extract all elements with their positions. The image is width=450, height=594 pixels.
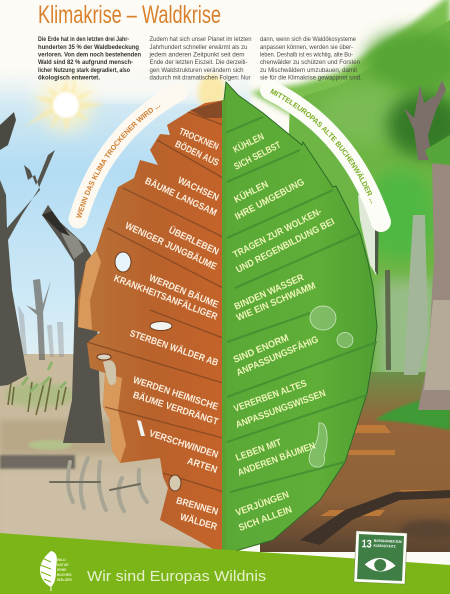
leaf labels: forest abilities: TRAGEN ZUR WOLKEN- [231,206,324,261]
leaf labels: forest abilities: ANPASSUNGSFÄHIG [235,334,320,379]
leaf labels: climate effects: BRENNEN [175,495,219,518]
intro text: column 2: dadurch mit dramatischen Folgen: Nur [150,74,251,82]
intro text: column 2: Zudem hat sich unser Planet im letzten [150,36,252,43]
illustration: dry ground [0,354,240,549]
illustration: forest floor [260,372,450,552]
logo wordmark: WILD [57,558,66,562]
midrib [222,100,226,550]
illustration: large dead tree left [0,112,55,386]
leaf labels: forest abilities [231,131,337,534]
illustration: green forest background [250,0,450,400]
intro text: column 3: dann, wenn sich die Waldökosysteme [260,36,356,43]
leaf labels: climate effects: ARTEN [186,456,219,476]
leaf labels: forest abilities: ANDEREN BÄUMEN [236,440,317,479]
footer slogan: Wir sind Europas Wildnis [87,568,266,585]
leaf labels: forest abilities: WIE EIN SCHWAMM [235,280,317,324]
leaf labels: climate effects: VERSCHWINDEN [148,428,220,461]
banner: left climate [68,92,188,228]
illustration: glow at the burning leaf tip [198,74,226,110]
illustration: broken dead tree [42,205,105,443]
leaf labels: climate effects: BÄUME LANGSAM [143,176,218,219]
logo wordmark [57,558,72,582]
leaf labels: climate effects: ÜBERLEBEN [167,225,220,258]
intro text: column 2: jedem anderen Zeitpunkt seit dem [149,52,245,58]
intro text: column 3 [260,36,362,82]
leaf labels: forest abilities: SIND ENORM [232,333,290,366]
leaf labels: climate effects [112,126,221,533]
intro text: column 2: Jahrhundert schneller erwärmt als zu [150,44,248,51]
badge: SDG 13 climate action: 13 [361,538,372,551]
intro text: column 1: verloren. Von dem noch bestehenden [38,52,141,58]
icon: beech leaf [40,551,57,591]
logo wordmark: WÄLDER [57,578,72,582]
illustration: big beech tree right [404,80,450,410]
intro text: column 1: licher Nutzung stark degradiert, also [38,67,130,74]
intro text: column 2: gen Waldstrukturen verändern sich [150,67,244,74]
logo wordmark: ERBE [57,568,67,572]
intro text: column 2: Ende der letzten Eiszeit. Die derzeiti- [150,59,248,66]
intro text: column 1: ökologisch entwertet. [38,74,100,82]
intro text: column 3: zu Mischwäldern umzubauen, damit [260,67,357,74]
banner: right beech forests: MITTELEUROPAS ALTE BUCHENWÄLDER ... [270,88,372,204]
leaf labels: forest abilities: BINDEN WASSER [233,272,306,313]
leaf labels: forest abilities: UND REGENBILDUNG BEI [234,216,337,276]
leaf labels: climate effects: WÄLDER [179,512,218,533]
illustration: dead rib-like roots [50,458,147,511]
intro text: column 1: Die Erde hat in den letzten drei Jahr- [38,36,129,43]
leaf labels: forest abilities: IHRE UMGEBUNG [233,177,306,223]
leaf labels: forest abilities: VERERBEN ALTES [232,378,309,415]
icon: eye with globe [364,557,396,572]
footer logo [40,551,72,591]
badge: SDG 13 climate action: MASSNAHMEN ZUM [374,539,402,544]
illustration: sun [22,72,105,133]
intro text: column 3: leben. Deshalb ist es wichtig, alte Bu- [260,52,353,58]
intro text: column 1: hunderten 35 % der Waldbedeckung [38,44,139,51]
leaf labels: forest abilities: KÜHLEN [231,131,266,156]
leaf labels: forest abilities: VERJÜNGEN [234,489,291,519]
leaf labels: climate effects: BÖDEN AUS [173,139,221,169]
leaf labels: climate effects: KRANKHEITSANFÄLLIGER [112,273,219,323]
leaf labels: forest abilities: LEBEN MIT [234,437,283,464]
banner: right beech forests [260,82,391,232]
illustration: distant dead trees [18,279,64,360]
badge: SDG 13 climate action: KLIMASCHUTZ [373,544,396,549]
badge: SDG 13 climate action [354,531,407,584]
intro text: column 2 [149,36,252,82]
title: Klimakrise – Waldkrise [38,1,221,29]
leaf labels: forest abilities: SICH ALLEIN [237,504,294,534]
logo wordmark: BUCHEN [57,573,72,577]
intro text: column 3: anpassen können, werden sie über- [260,44,353,51]
leaf labels: climate effects: WENIGER JUNGBÄUME [123,220,219,273]
leaf labels: climate effects: STERBEN WÄLDER AB [128,328,220,369]
leaf labels: forest abilities: ANPASSUNGSWISSEN [234,388,327,431]
intro text: column 3: sie für die Klimakrise gewappnet sind. [260,74,362,82]
holes in the leaf [97,252,181,491]
footer band [0,533,450,594]
leaf: dying brown half [78,100,225,550]
banner: left climate: WENN DAS KLIMA TROCKENER WIRD ... [76,106,160,218]
illustration: dry sky [0,70,250,380]
leaf labels: climate effects: WACHSEN [176,175,220,204]
leaf: healthy green half [222,82,377,552]
leaf labels: climate effects: WERDEN HEIMISCHE [131,375,220,413]
leaf labels: forest abilities: KÜHLEN [232,179,270,206]
leaf labels: forest abilities: SICH SELBST [232,140,283,173]
illustration: background trunks [358,195,428,375]
logo wordmark: NATUR [57,563,69,567]
intro text: column 1 [38,36,141,82]
water drops [309,306,353,467]
intro text: column 1: Wald sind 82 % aufgrund mensch- [38,59,133,66]
leaf labels: climate effects: WERDEN BÄUME [147,273,221,311]
leaf labels: climate effects: BÄUME VERDRÄNGT [131,390,220,428]
intro text: column 3: chenwälder zu schützen und Forsten [260,59,360,66]
leaf labels: climate effects: TROCKNEN [177,126,220,153]
